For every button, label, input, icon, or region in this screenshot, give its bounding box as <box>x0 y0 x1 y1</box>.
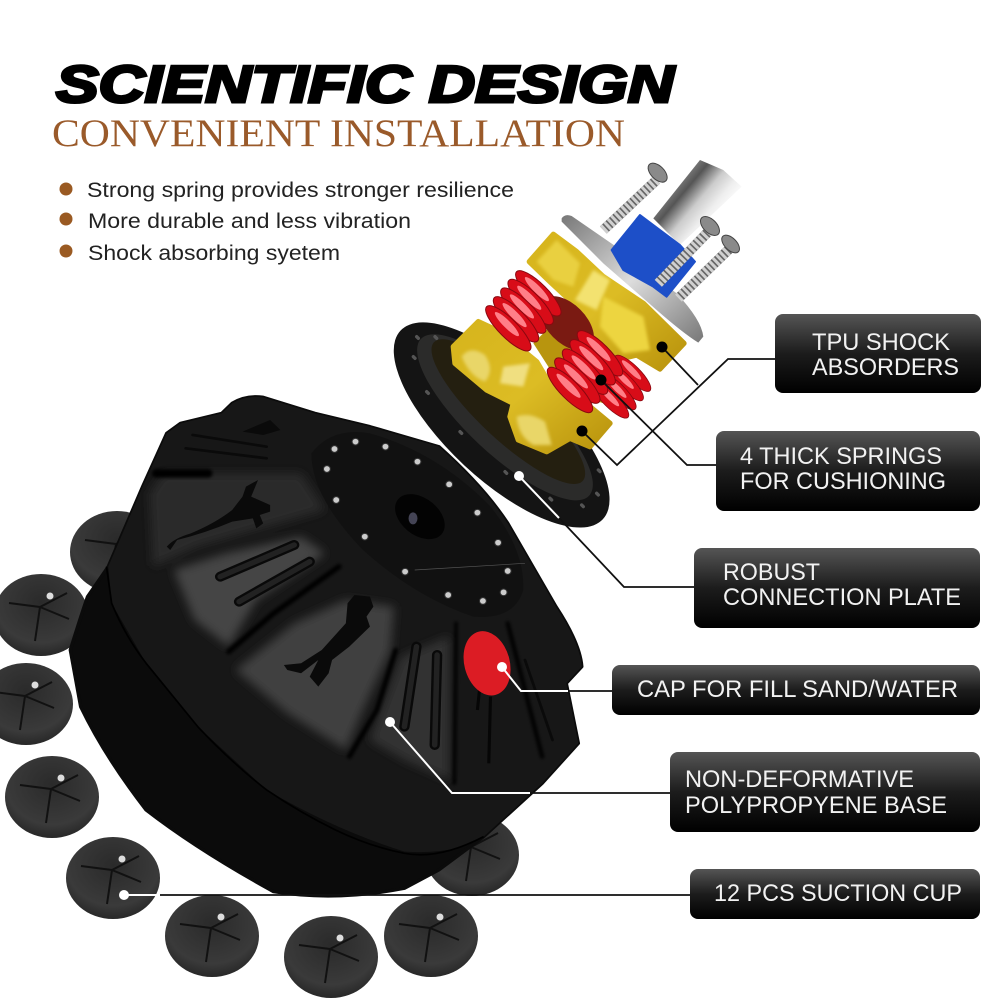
subtitle: CONVENIENT INSTALLATION <box>52 112 625 155</box>
title: SCIENTIFIC DESIGN <box>56 56 676 114</box>
red springs <box>480 265 655 423</box>
screws <box>603 160 743 298</box>
label: 4 thick springs: 4 THICK SPRINGS <box>740 443 942 470</box>
label: connection plate: CONNECTION PLATE <box>723 584 961 611</box>
ridge shadows <box>156 473 542 783</box>
label: TPU shock absorbers <box>775 314 981 393</box>
feature bullet list: More durable and less vibration <box>88 209 411 233</box>
polypropylene base <box>70 397 582 896</box>
label: connection plate <box>694 548 980 628</box>
top disc with bolts <box>311 432 525 617</box>
label: base: POLYPROPYENE BASE <box>685 792 947 819</box>
embossed slots <box>186 435 552 745</box>
label: base: NON-DEFORMATIVE <box>685 766 914 793</box>
red fill cap <box>457 626 517 700</box>
label: 4 thick springs: FOR CUSHIONING <box>740 468 946 495</box>
label: TPU shock absorbers: TPU SHOCK <box>812 329 950 356</box>
yellow lower absorbers <box>453 322 610 452</box>
shaft <box>653 160 742 245</box>
connection plate <box>363 290 640 560</box>
blue sleeve <box>612 215 695 297</box>
label: connection plate: ROBUST <box>723 559 820 586</box>
label: suction cup <box>690 869 980 919</box>
yellow upper absorbers <box>529 234 684 369</box>
label: cap: CAP FOR FILL SAND/WATER <box>637 676 958 703</box>
label: TPU shock absorbers: ABSORDERS <box>812 354 959 381</box>
yellow core behind springs <box>533 300 630 403</box>
spring and shock assembly <box>363 160 743 560</box>
label: cap <box>612 665 980 715</box>
label: suction cup: 12 PCS SUCTION CUP <box>714 880 962 907</box>
leader lines <box>119 342 775 900</box>
shell highlights <box>150 473 449 780</box>
label: base <box>670 752 980 832</box>
feature bullet list: Shock absorbing syetem <box>88 241 340 265</box>
label: 4 thick springs <box>716 431 980 511</box>
embossed figures <box>167 480 270 550</box>
feature bullet list <box>60 178 514 265</box>
metal top plate <box>562 215 703 343</box>
feature bullet list: Strong spring provides stronger resilience <box>87 178 514 202</box>
suction cups <box>0 511 519 998</box>
